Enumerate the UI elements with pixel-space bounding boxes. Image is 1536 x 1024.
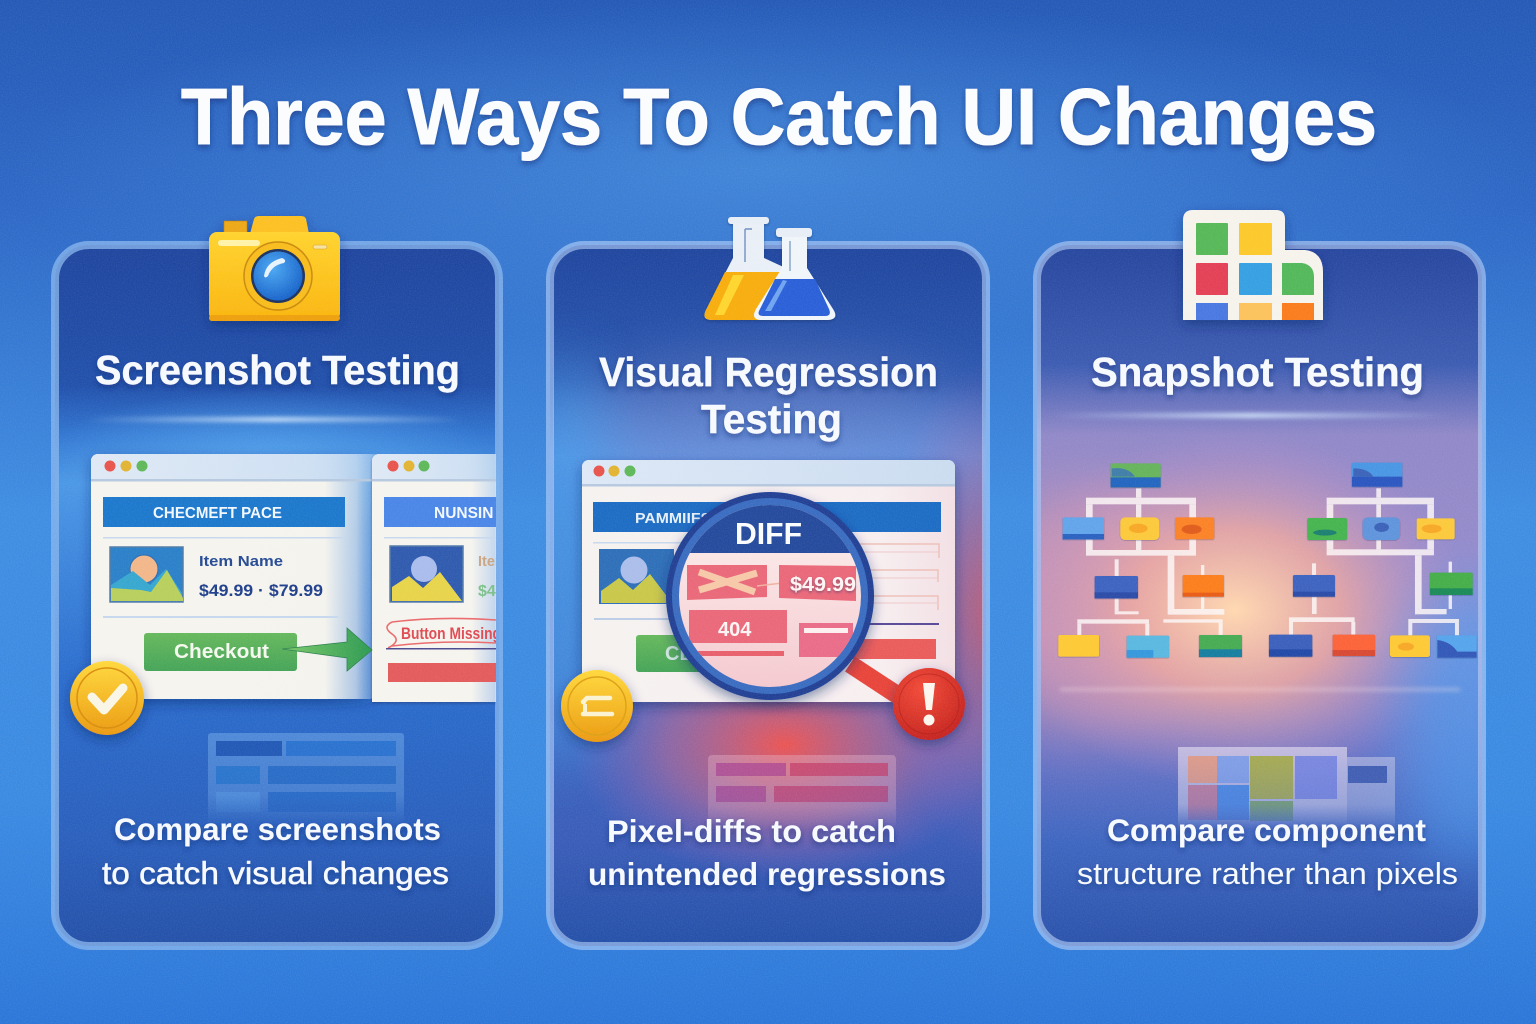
icon: check coin (70, 661, 144, 735)
caption: snapshot testing (1077, 812, 1458, 891)
heading: snapshot testing: Snapshot Testing (1091, 349, 1424, 395)
icon: flasks (704, 217, 835, 320)
panel: visual regression testing (546, 241, 990, 950)
divider glow (85, 417, 465, 422)
browser: second screenshot, missing button (372, 454, 508, 702)
browser: diff page (582, 460, 955, 702)
caption: screenshot testing (102, 811, 449, 891)
faint mock screen (208, 733, 404, 825)
heading: visual regression testing: Testing (701, 396, 842, 442)
magnifier: diff: $49.99 (790, 574, 856, 596)
panel: screenshot testing (40, 245, 508, 946)
browser: checkout page (91, 454, 376, 699)
browser: second screenshot, missing button: Button Missing (401, 624, 501, 643)
arrow: green comparison (282, 628, 372, 671)
caption: snapshot testing: structure rather than pixels (1077, 856, 1458, 891)
magnifier: diff: DIFF (735, 516, 802, 551)
browser: checkout page: $49.99 · $79.99 (199, 581, 323, 600)
magnifier: diff (666, 492, 874, 700)
browser: second screenshot, missing button: NUNSIN (434, 505, 493, 522)
heading: visual regression testing: Visual Regression (599, 349, 938, 395)
browser: checkout page: Checkout (174, 640, 269, 663)
browser: diff page: PAMMIIFS (635, 510, 711, 527)
caption: visual regression testing: Pixel-diffs to catch (607, 813, 896, 849)
caption: visual regression testing: unintended regressions (588, 856, 946, 892)
caption: snapshot testing: Compare component (1107, 812, 1427, 848)
heading: screenshot testing: Screenshot Testing (95, 347, 460, 393)
caption: screenshot testing: to catch visual changes (102, 855, 449, 891)
nodes (1058, 463, 1477, 658)
icon: camera (209, 216, 340, 321)
magnifier: diff: 404 (718, 619, 752, 641)
icon: alert (893, 668, 965, 740)
browser: second screenshot, missing button: Item (478, 554, 508, 570)
caption: screenshot testing: Compare screenshots (114, 811, 441, 847)
component trees (1058, 463, 1477, 658)
panel: snapshot testing (1033, 241, 1486, 950)
caption: visual regression testing (588, 813, 946, 892)
browser: checkout page: Item Name (199, 554, 283, 570)
icon: magnifier handle (850, 664, 908, 702)
icon: color grid card (1183, 210, 1323, 320)
icon: yellow coin (561, 670, 633, 742)
browser: checkout page: CHECMEFT PACE (153, 505, 282, 522)
connectors (1077, 488, 1459, 636)
divider glow (1050, 413, 1450, 418)
browser: second screenshot, missing button: $49 (478, 583, 505, 600)
heading: visual regression testing (599, 349, 938, 442)
faint mock screen (1178, 747, 1395, 832)
browser: diff page: CL (665, 643, 692, 665)
faint mock screen (708, 755, 896, 830)
title: Three Ways To Catch UI Changes (181, 72, 1377, 161)
